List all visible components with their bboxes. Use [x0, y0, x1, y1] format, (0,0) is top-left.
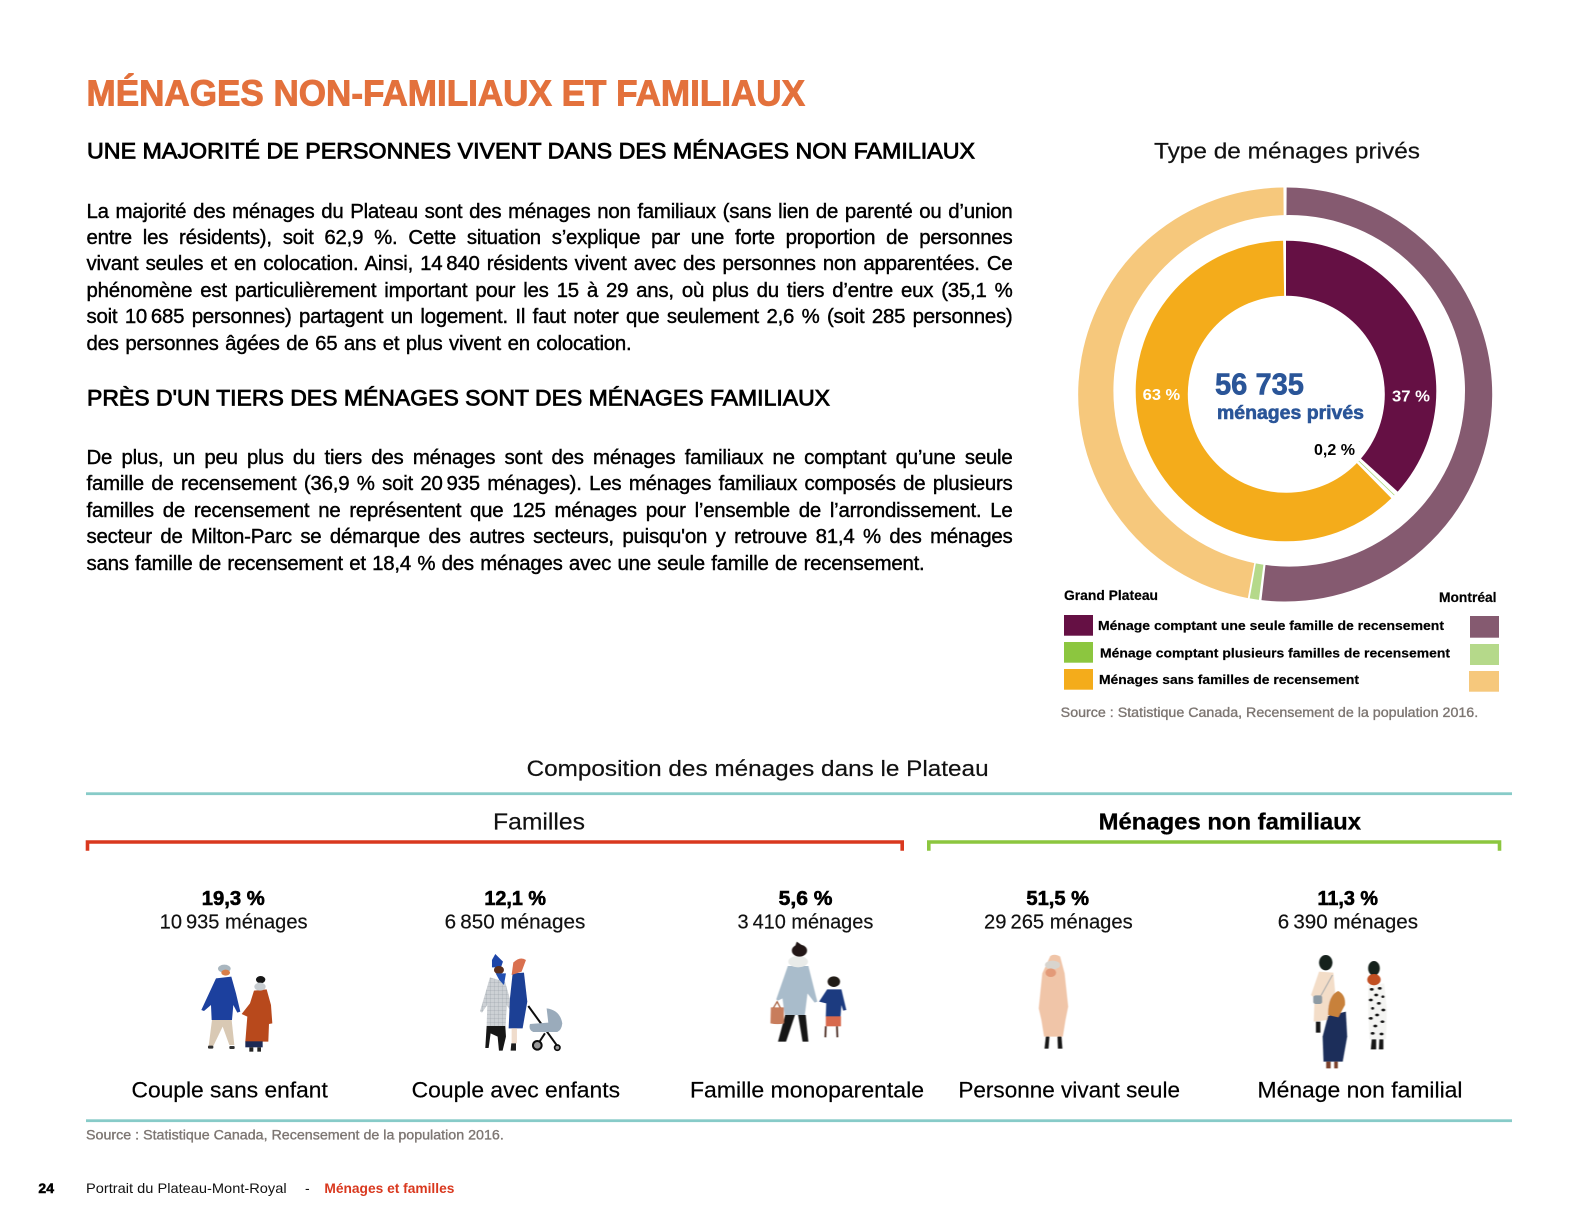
- donut value labels: 63 %: [1143, 387, 1180, 404]
- green bracket: [929, 842, 1500, 851]
- value: 11,3 %: [1318, 888, 1378, 910]
- donut centre total: [1215, 366, 1364, 424]
- count: 3 410 ménages: [738, 912, 873, 934]
- inner ring: Grand Plateau: [1114, 219, 1458, 563]
- count: 6 390 ménages: [1278, 912, 1418, 934]
- group: ménages non familiaux: [929, 808, 1500, 851]
- title: MÉNAGES NON-FAMILIAUX ET FAMILIAUX: [86, 73, 805, 114]
- text: soit 10 685 personnes) partagent un logement. Il faut noter que seulement 2,6 % (soit 285 personnes): [86, 306, 1012, 328]
- legend text: [1098, 618, 1451, 687]
- illustration: parent et enfant: [770, 942, 846, 1042]
- footer: [38, 1180, 455, 1196]
- count: 10 935 ménages: [160, 912, 308, 934]
- legend text: Ménages sans familles de recensement: [1099, 672, 1360, 687]
- donut centre total: 56 735: [1215, 366, 1304, 402]
- legend text: Ménage comptant une seule famille de recensement: [1098, 618, 1445, 633]
- column: famille monoparentale: [690, 888, 924, 1102]
- illustration: personne seule: [1039, 955, 1068, 1049]
- label: Couple avec enfants: [412, 1077, 620, 1102]
- count: 29 265 ménages: [984, 912, 1133, 934]
- legend column headers: [1064, 587, 1496, 605]
- column: couple avec enfants: [412, 888, 620, 1102]
- label: Famille monoparentale: [690, 1077, 924, 1102]
- donut centre total: ménages privés: [1217, 403, 1364, 424]
- illustration: couple et poussette: [480, 954, 562, 1051]
- chart title: type de ménages privés: Type de ménages privés: [1154, 139, 1420, 164]
- text: De plus, un peu plus du tiers des ménages sont des ménages familiaux ne comptant qu’une seule: [86, 446, 1012, 468]
- text: familles de recensement ne représentent que 125 ménages pour l’ensemble de l’arrondissement. Le: [86, 500, 1012, 522]
- legend: [1064, 587, 1499, 692]
- text: secteur de Milton-Parc se démarque des autres secteurs, puisqu'on y retrouve 81,4 % des ménages: [86, 526, 1012, 548]
- donut value labels: [1143, 387, 1430, 459]
- document name: Portrait du Plateau-Mont-Royal: [86, 1180, 287, 1196]
- familles heading: Familles: [493, 808, 585, 834]
- donut value labels: 0,2 %: [1314, 442, 1355, 459]
- illustration: colocataires: [1311, 955, 1387, 1068]
- donut value labels: 37 %: [1392, 389, 1430, 406]
- group: familles: [88, 808, 902, 851]
- text: phénomène est particulièrement important pour les 15 à 29 ans, où plus du tiers d’entre eux (35,1 %: [86, 280, 1012, 302]
- source: donut chart: Source : Statistique Canada, Recensement de la population 2016.: [1061, 705, 1478, 720]
- legend column headers: Montréal: [1439, 589, 1496, 605]
- illustration: couple âgé: [201, 965, 272, 1052]
- bottom teal rule: [86, 1119, 1512, 1122]
- heading: tiers des ménages familiaux: PRÈS D'UN TIERS DES MÉNAGES SONT DES MÉNAGES FAMILIAUX: [87, 386, 830, 411]
- text: La majorité des ménages du Plateau sont des ménages non familiaux (sans lien de parenté ou d’union: [86, 200, 1012, 222]
- label: Personne vivant seule: [958, 1077, 1180, 1102]
- value: 51,5 %: [1026, 888, 1089, 910]
- text: entre les résidents), soit 62,9 %. Cette situation s’explique par une forte proportion de personnes: [86, 227, 1012, 249]
- source: composition: Source : Statistique Canada, Recensement de la population 2016.: [86, 1127, 504, 1142]
- label: Couple sans enfant: [132, 1077, 328, 1102]
- non familiaux heading: Ménages non familiaux: [1099, 808, 1361, 834]
- section title: composition des ménages: Composition des ménages dans le Plateau: [527, 756, 989, 781]
- legend swatches: Montréal: [1469, 616, 1499, 692]
- text: des personnes âgées de 65 ans et plus vivent en colocation.: [86, 333, 632, 355]
- column: personne vivant seule: [958, 888, 1180, 1102]
- red bracket: [88, 842, 902, 851]
- text: vivant seules et en colocation. Ainsi, 14 840 résidents vivent avec des personnes non apparentées. Ce: [86, 253, 1012, 275]
- text: famille de recensement (36,9 % soit 20 935 ménages). Les ménages familiaux composés de plusieurs: [86, 473, 1012, 495]
- column: couple sans enfant: [132, 888, 328, 1102]
- value: 12,1 %: [484, 888, 546, 910]
- legend swatches: Grand Plateau: [1064, 615, 1093, 690]
- legend column headers: Grand Plateau: [1064, 587, 1158, 603]
- donut chart: [1066, 176, 1504, 613]
- heading: majorité non familiaux: UNE MAJORITÉ DE PERSONNES VIVENT DANS DES MÉNAGES NON FAMILIAUX: [87, 138, 975, 163]
- separator: -: [305, 1180, 310, 1196]
- outer ring: Montréal: [1066, 176, 1504, 613]
- page number: 24: [38, 1180, 54, 1196]
- value: 5,6 %: [779, 888, 833, 910]
- column: ménage non familial: [1258, 888, 1462, 1102]
- top teal rule: [86, 792, 1512, 795]
- count: 6 850 ménages: [445, 912, 585, 934]
- label: Ménage non familial: [1258, 1077, 1462, 1102]
- legend text: Ménage comptant plusieurs familles de recensement: [1100, 646, 1451, 661]
- value: 19,3 %: [202, 888, 265, 910]
- text: sans famille de recensement et 18,4 % des ménages avec une seule famille de recensement.: [86, 552, 924, 574]
- section name: Ménages et familles: [324, 1180, 455, 1196]
